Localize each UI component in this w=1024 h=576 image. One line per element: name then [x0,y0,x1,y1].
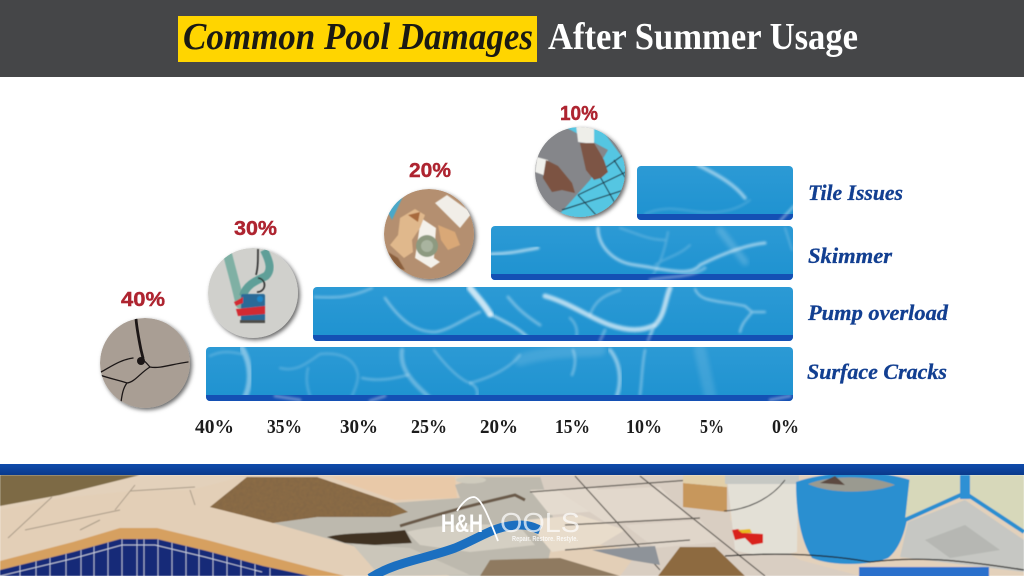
value: 20%: 20% [409,160,451,182]
blue hose, bottom right [859,567,989,576]
bar chart [206,165,794,401]
x axis labels [195,416,799,438]
x axis labels: 20% [480,416,518,438]
x axis labels: 10% [626,416,662,438]
title highlight: Common Pool Damages: Common Pool Damages [183,16,533,58]
icon: surface crack photo [100,318,190,408]
back wall [905,475,1024,530]
bar: Skimmer [491,226,793,280]
value: 10%: 10% [560,103,598,125]
footer divider band [0,464,1024,475]
pool coping [0,528,345,576]
concrete trench [273,476,620,576]
logo: H&H Pools [441,497,580,543]
x axis labels: 15% [555,416,590,438]
label: Pump overload: Pump overload [807,300,949,325]
x axis labels: 5% [700,416,724,438]
bar: Pump overload [313,287,793,341]
x axis labels: 0% [772,416,799,438]
footer photo: damaged pool deck [0,473,1024,576]
dirt mound [210,477,408,523]
title: After Summer Usage: After Summer Usage [548,16,858,58]
wooden edge, top left [0,475,140,506]
label: Tile Issues: Tile Issues [808,180,903,205]
pool tile wall [0,538,310,576]
cardboard box [683,483,727,512]
value: 40%: 40% [121,289,165,311]
label: Skimmer: Skimmer [808,243,892,268]
header band [0,0,1024,77]
dirt pile [658,547,745,576]
bar: Tile Issues [637,165,794,221]
icon: tile repair photo [535,124,632,220]
logo: H&H Pools: H&H [441,510,483,538]
pool skimmer net [900,475,1024,572]
x axis labels: 25% [411,416,447,438]
peach slabs, top centre [330,477,457,500]
value labels [121,103,598,311]
right floor tiles [525,476,860,576]
icon: skimmer photo [384,189,474,279]
value: 30%: 30% [234,218,277,240]
icon: pump photo [208,248,298,338]
blue hose, centre [370,525,540,576]
bucket [724,475,799,555]
label: Surface Cracks: Surface Cracks [807,359,947,384]
logo: H&H Pools: Repair. Restore. Restyle. [512,536,578,543]
x axis labels: 40% [195,416,234,438]
bar: Surface Cracks [206,347,793,401]
logo: H&H Pools: OOLS [500,507,580,538]
x axis labels: 30% [340,416,378,438]
x axis labels: 35% [267,416,302,438]
category labels [807,180,949,384]
blue tub [796,473,910,564]
